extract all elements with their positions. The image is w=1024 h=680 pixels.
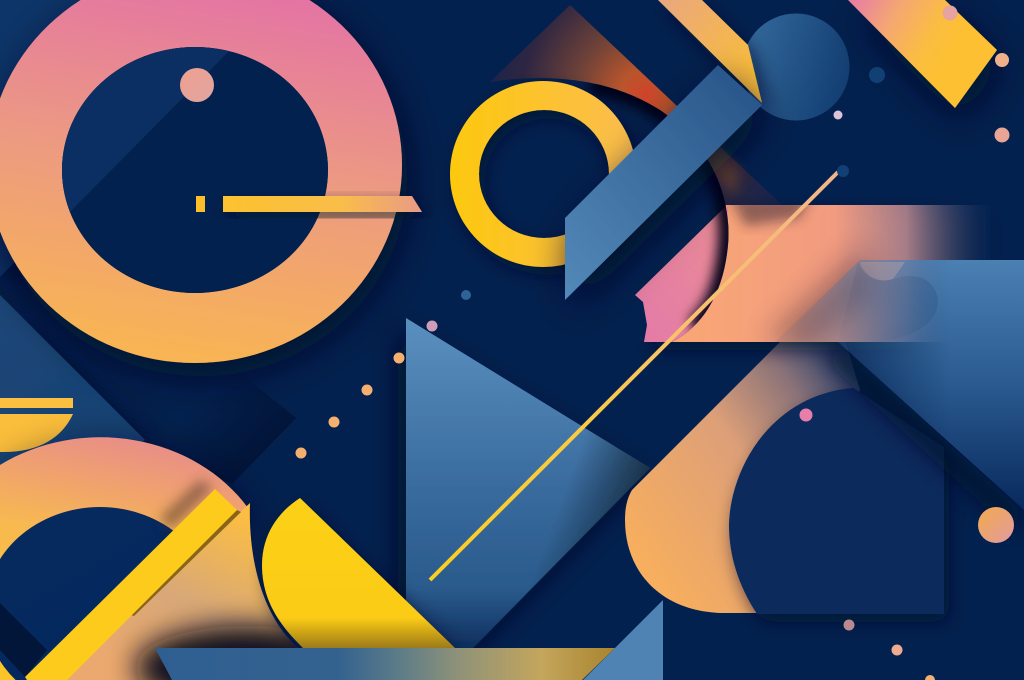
- banner shadows: [730, 195, 880, 350]
- diagonal line: [430, 172, 838, 580]
- arc inner shadow: [590, 84, 728, 328]
- bottom right triangle: [583, 600, 663, 680]
- blob on panel: [876, 276, 938, 318]
- yellow ring: [450, 81, 636, 267]
- house peach shape: [625, 340, 860, 613]
- top right bar: [848, 0, 997, 108]
- peach fan: [67, 503, 298, 680]
- top circle: [742, 14, 850, 120]
- panel diagonal shadow: [833, 352, 1018, 522]
- panel: lower left triangle: [0, 295, 145, 500]
- right blue panel: [775, 260, 1024, 510]
- scattered dots: [461, 6, 1014, 680]
- yellow rounded shape: [262, 498, 455, 648]
- dot on ring: [180, 68, 214, 102]
- icon: half circle with bar: [0, 398, 73, 452]
- lower left ring: [0, 437, 248, 680]
- bar shadow strip: [128, 510, 241, 616]
- blue diagonal bar: [565, 65, 762, 300]
- navy arc area: [490, 78, 728, 342]
- lower left ring interior: [0, 507, 173, 680]
- yellow diagonal bar: [25, 489, 237, 680]
- pink curved shape: [635, 207, 728, 342]
- bar in ring: [223, 196, 422, 212]
- big ring: [0, 0, 402, 363]
- house navy shape: [729, 388, 944, 614]
- panel: upper left diagonal: [0, 0, 277, 277]
- bottom blue bar: [155, 648, 615, 680]
- bar shadow on ring: [160, 480, 213, 530]
- centre triangle: [406, 318, 650, 648]
- dot chain: [296, 320, 438, 458]
- peach banner: [644, 205, 1000, 342]
- dark triangle with red glow: [490, 5, 800, 260]
- small bar tick: [196, 196, 205, 212]
- blob highlight: [860, 262, 905, 280]
- top yellow bar: [658, 0, 762, 103]
- brown glow on triangle: [705, 140, 740, 195]
- panel: lower centre diagonal shadow: [130, 340, 296, 484]
- ring interior: [62, 47, 328, 293]
